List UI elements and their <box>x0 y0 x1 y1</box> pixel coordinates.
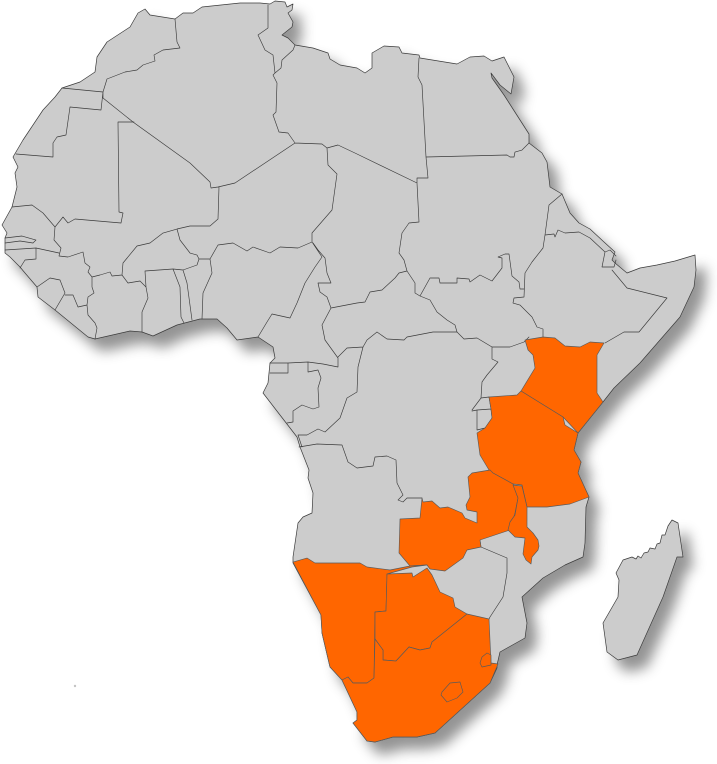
highlighted country: Zambia <box>399 470 518 571</box>
highlighted country: Kenya <box>521 337 604 433</box>
small mark <box>74 685 76 687</box>
highlighted country: Lesotho <box>441 682 463 702</box>
Madagascar <box>603 520 683 660</box>
country borders <box>5 5 667 619</box>
highlighted country: Malawi <box>508 485 539 564</box>
highlighted country: Tanzania <box>477 391 589 507</box>
highlighted country: Namibia <box>293 558 427 683</box>
highlighted country: Botswana <box>375 568 467 661</box>
highlighted country: South Africa <box>342 614 498 742</box>
highlighted country: Swaziland <box>480 653 491 667</box>
